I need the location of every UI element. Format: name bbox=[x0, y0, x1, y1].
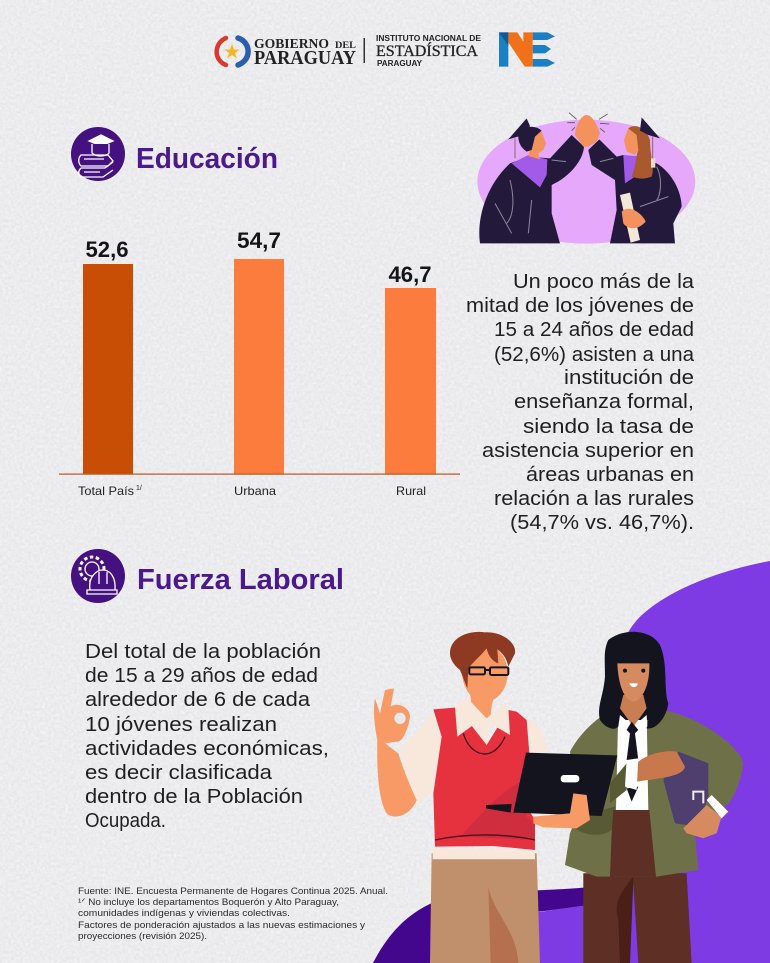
bar: Rural bbox=[385, 288, 436, 474]
text: labour force paragraph: Ocupada. bbox=[85, 810, 166, 832]
text: education paragraph: institución de bbox=[564, 367, 694, 389]
illustration: graduates high five bbox=[477, 113, 695, 244]
footnote: source: Factores de ponderación ajustados a las nuevas estimaciones y bbox=[78, 920, 365, 931]
logo text: Instituto Nacional de Estadística bbox=[376, 33, 481, 68]
left graduate bbox=[479, 118, 584, 243]
hands bbox=[575, 115, 600, 147]
text: labour force paragraph: Del total de la población bbox=[85, 641, 321, 663]
footnote: source: comunidades indígenas y viviendas colectivas. bbox=[78, 908, 290, 919]
laptop bbox=[486, 753, 617, 828]
label: Rural: Rural bbox=[396, 484, 426, 498]
logo text: Instituto Nacional de Estadística: ESTADÍSTICA bbox=[376, 41, 478, 60]
text: education paragraph: mitad de los jóvenes de bbox=[466, 295, 694, 317]
logo text: Gobierno del Paraguay: DEL bbox=[335, 40, 356, 50]
man bbox=[374, 632, 548, 963]
logo text: Gobierno del Paraguay: PARAGUAY bbox=[254, 48, 356, 69]
label: Urbana: Urbana bbox=[234, 484, 276, 498]
text: labour force paragraph: dentro de la Población bbox=[85, 786, 303, 808]
bar: Urbana bbox=[234, 259, 284, 474]
text: labour force paragraph bbox=[85, 641, 329, 832]
bar chart: school attendance bbox=[59, 228, 460, 498]
right graduate bbox=[588, 117, 682, 243]
heading: Fuerza Laboral: Fuerza Laboral bbox=[137, 564, 344, 596]
text: education paragraph: relación a las rurales bbox=[494, 488, 694, 510]
logo text: Gobierno del Paraguay: GOBIERNO bbox=[254, 37, 329, 52]
text: education paragraph: enseñanza formal, bbox=[514, 391, 694, 413]
heading: Educación: Educación bbox=[136, 143, 278, 175]
text: labour force paragraph: es decir clasificada bbox=[85, 762, 273, 784]
value: 46,7: 46,7 bbox=[388, 262, 432, 287]
value: 52,6: 52,6 bbox=[86, 237, 128, 262]
text: education paragraph: siendo la tasa de bbox=[523, 416, 694, 438]
icon: education (books and cap) bbox=[71, 127, 125, 181]
footnote: source bbox=[78, 886, 388, 942]
footnote: source: Fuente: INE. Encuesta Permanente de Hogares Continua 2025. Anual. bbox=[78, 886, 388, 897]
text: education paragraph: 15 a 24 años de edad bbox=[494, 319, 694, 341]
illustration: young workers bbox=[374, 632, 743, 963]
footnote: source: proyecciones (revisión 2025). bbox=[78, 931, 207, 942]
logo text: Instituto Nacional de Estadística: INSTITUTO NACIONAL DE bbox=[376, 33, 481, 43]
value: 54,7: 54,7 bbox=[237, 228, 281, 253]
text: education paragraph: áreas urbanas en bbox=[526, 464, 694, 486]
text: labour force paragraph: de 15 a 29 años de edad bbox=[85, 665, 318, 687]
logo: INE bbox=[499, 32, 555, 67]
logo text: Instituto Nacional de Estadística: PARAGUAY bbox=[377, 59, 423, 68]
background shape: dark purple wave bbox=[373, 887, 590, 963]
text: education paragraph: Un poco más de la bbox=[513, 271, 695, 293]
text: labour force paragraph: 10 jóvenes realizan bbox=[85, 714, 277, 736]
woman bbox=[565, 632, 743, 963]
text: education paragraph: (54,7% vs. 46,7%). bbox=[510, 512, 694, 534]
text: labour force paragraph: alrededor de 6 de cada bbox=[85, 689, 311, 711]
header logos bbox=[217, 32, 555, 69]
logo text: Gobierno del Paraguay bbox=[254, 37, 356, 69]
text: labour force paragraph: actividades económicas, bbox=[85, 738, 329, 760]
footnote: source: ¹ᐟ No incluye los departamentos Boquerón y Alto Paraguay, bbox=[78, 897, 339, 908]
text: education paragraph bbox=[466, 271, 695, 534]
logo: Gobierno del Paraguay crest bbox=[217, 38, 248, 65]
text: education paragraph: (52,6%) asisten a una bbox=[494, 344, 695, 366]
bar chart: school attendance: 1/ bbox=[136, 485, 142, 492]
background shape: purple blob bbox=[482, 561, 770, 963]
label: Total País: Total País bbox=[78, 484, 134, 498]
bar: Total País bbox=[83, 264, 133, 474]
text: education paragraph: asistencia superior en bbox=[482, 440, 694, 462]
icon: labour force (gear and helmet) bbox=[71, 549, 125, 603]
